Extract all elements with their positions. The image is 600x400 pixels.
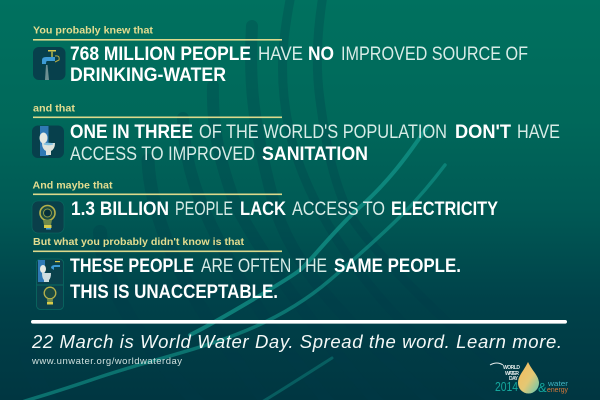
statement: drinking water [70, 44, 528, 86]
statement: same people: THESE PEOPLE [70, 256, 194, 277]
statement: sanitation: OF THE WORLD'S POPULATION [199, 122, 447, 143]
statement: drinking water: HAVE [258, 44, 303, 65]
logo: World Water Day 2014: WORLD [503, 365, 520, 371]
statement: sanitation: SANITATION [262, 144, 368, 165]
logo: World Water Day 2014: water [547, 379, 569, 388]
statement: same people [70, 256, 461, 303]
logo: World Water Day 2014: DAY [509, 376, 519, 382]
statement: sanitation: ACCESS TO IMPROVED [70, 144, 255, 165]
statement: sanitation: ONE IN THREE [70, 122, 193, 143]
statement: electricity: LACK [240, 199, 286, 220]
icon: light bulb [32, 201, 64, 233]
statement: same people: ARE OFTEN THE [201, 256, 327, 277]
statement: drinking water: NO [308, 44, 334, 65]
statement: electricity [71, 199, 498, 220]
statement: electricity: ELECTRICITY [391, 199, 498, 220]
logo: World Water Day 2014: & [538, 380, 547, 395]
statement: sanitation: DON'T [455, 122, 511, 143]
website url: www.unwater.org/worldwaterday [31, 356, 182, 367]
statement: electricity: PEOPLE [175, 199, 233, 220]
heading: But what you probably didn't know is that: But what you probably didn't know is that [33, 236, 245, 248]
statement: drinking water: IMPROVED SOURCE OF [341, 44, 528, 65]
statement: electricity: 1.3 BILLION [71, 199, 169, 220]
background: light teal arcs [15, 127, 445, 400]
logo: World Water Day 2014: 2014 [495, 379, 518, 394]
divider: white rule [31, 320, 567, 324]
heading: and that: and that [33, 102, 76, 114]
logo: World Water Day 2014 [490, 362, 569, 395]
icon: toilet [32, 126, 64, 158]
heading: You probably knew that: You probably knew that [33, 24, 154, 36]
statement: drinking water: 768 MILLION PEOPLE [70, 44, 251, 65]
icon: water tap [33, 47, 66, 80]
statement: electricity: ACCESS TO [292, 199, 385, 220]
statement: same people: SAME PEOPLE. [334, 256, 461, 277]
statement: same people: THIS IS UNACCEPTABLE. [70, 282, 278, 303]
icon: combined tap, toilet and bulb [36, 259, 64, 310]
logo: World Water Day 2014: energy [547, 385, 568, 394]
statement: sanitation [70, 122, 560, 165]
statement: drinking water: DRINKING-WATER [70, 65, 226, 86]
heading: And maybe that: And maybe that [32, 180, 113, 192]
statement: sanitation: HAVE [517, 122, 560, 143]
call to action: 22 March is World Water Day. Spread the word. Learn more. [31, 331, 562, 352]
logo: World Water Day 2014: WATER [505, 371, 519, 377]
